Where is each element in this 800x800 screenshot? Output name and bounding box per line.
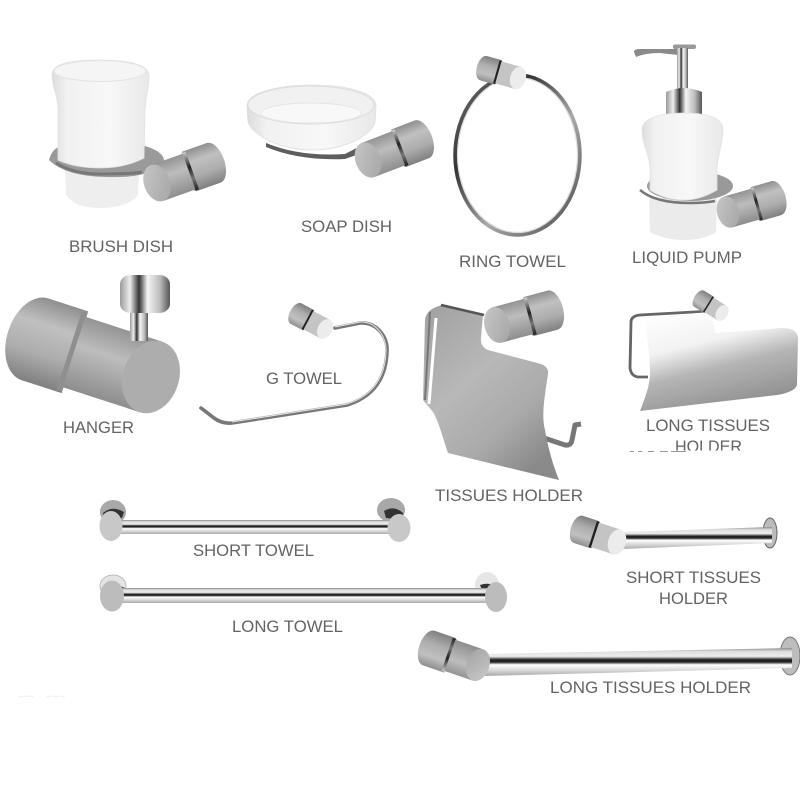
- ring: [456, 76, 580, 234]
- bowl: [247, 85, 376, 150]
- body: [0, 290, 191, 427]
- product: tissues holder: [423, 288, 581, 480]
- product: ring towel: [456, 54, 580, 234]
- far mounts: [100, 500, 126, 524]
- cover plate: [423, 305, 559, 480]
- label: short tissues holder: [626, 569, 761, 608]
- label: g towel: G TOWEL: [266, 370, 342, 388]
- wire frame: [630, 311, 712, 377]
- mount: [713, 179, 790, 232]
- mount: [567, 513, 630, 558]
- holder ring: [49, 146, 164, 177]
- holder band: [56, 163, 142, 174]
- label: long tissues holder (clipped): [630, 417, 770, 456]
- band: [640, 190, 715, 203]
- product: long tissues holder with cover: [630, 288, 798, 411]
- knob stem: [130, 310, 148, 341]
- mount: [480, 288, 568, 348]
- product: g towel: [201, 300, 387, 423]
- product: brush dish: [49, 60, 231, 208]
- collar: [666, 88, 702, 117]
- label: long towel: LONG TOWEL: [232, 618, 343, 636]
- label: long tissues holder: LONG TISSUES HOLDER: [550, 679, 751, 697]
- bottle: [642, 113, 723, 200]
- mount: [285, 300, 337, 343]
- product: liquid pump: [634, 44, 790, 240]
- rod: [622, 527, 772, 549]
- rod: [118, 520, 392, 534]
- bent rod: [201, 323, 387, 423]
- second line: HOLDER: [675, 438, 742, 456]
- stem: [677, 48, 688, 90]
- lower cup: [649, 198, 717, 240]
- end cap: [113, 333, 189, 421]
- rod: [118, 588, 490, 603]
- metal plate: [266, 138, 376, 159]
- label: short towel: SHORT TOWEL: [193, 542, 314, 560]
- lower cup: [65, 170, 139, 208]
- flange: [763, 518, 777, 548]
- spout and head: [634, 49, 678, 57]
- mount: [474, 54, 529, 92]
- slot: [429, 318, 436, 404]
- product: soap dish: [247, 85, 439, 183]
- end caps: [100, 511, 122, 541]
- end caps: [100, 580, 124, 612]
- label: hanger: HANGER: [63, 419, 134, 437]
- rod: [485, 648, 792, 676]
- label: tissues holder: TISSUES HOLDER: [435, 487, 583, 505]
- flange: [780, 637, 800, 675]
- label: ring towel: RING TOWEL: [459, 253, 566, 271]
- product: short tissues holder: [567, 513, 777, 558]
- cover plate: [640, 312, 798, 411]
- mount: [690, 288, 732, 324]
- plate: [647, 171, 733, 201]
- wall mount cylinder: [349, 117, 439, 183]
- far mounts: [100, 575, 126, 597]
- label: liquid pump: LIQUID PUMP: [632, 249, 742, 267]
- wall mount cylinder: [138, 139, 231, 207]
- clipped remnants: [630, 450, 686, 452]
- knob head: [120, 275, 170, 313]
- product: short towel: [100, 498, 410, 542]
- label: brush dish: BRUSH DISH: [69, 238, 173, 256]
- first line: LONG TISSUES: [646, 417, 770, 435]
- product: hanger: [0, 275, 191, 427]
- product: long tissues holder: [414, 628, 800, 686]
- hook: [544, 424, 581, 445]
- product: long towel: [100, 572, 507, 612]
- second line: HOLDER: [659, 590, 728, 608]
- top edge: [441, 305, 484, 315]
- cup: [52, 60, 149, 168]
- mount: [414, 628, 495, 686]
- label: soap dish: SOAP DISH: [301, 218, 392, 236]
- first line: SHORT TISSUES: [626, 569, 761, 587]
